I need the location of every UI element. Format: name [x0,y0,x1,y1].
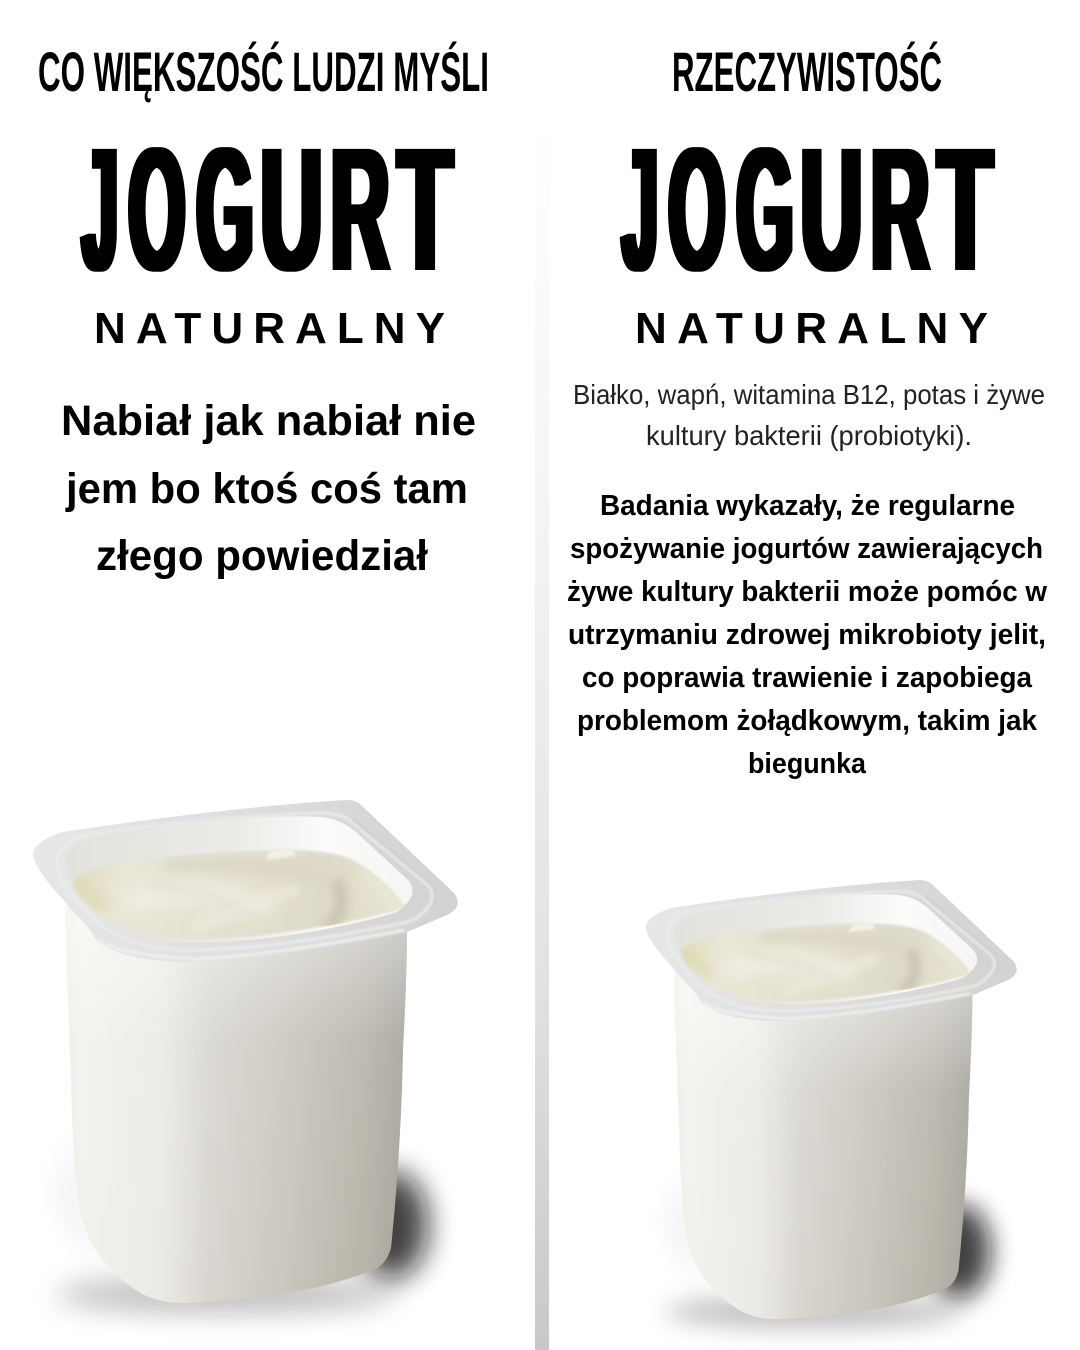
text block: research findings: utrzymaniu zdrowej mikrobioty jelit, [568,619,1046,651]
title: jogurt left: J [82,112,118,308]
image: yogurt cup left [33,800,458,1313]
title: jogurt right: J [622,112,658,308]
text block: common belief [61,397,476,580]
subtitle: naturalny right: NATURALNY [635,304,988,353]
title: jogurt left: T [398,112,453,308]
text block: common belief: Nabiał jak nabiał nie [61,397,476,445]
image: yogurt cup right [646,880,1017,1328]
text block: research findings: żywe kultury bakterii może pomóc w [567,576,1047,608]
title: jogurt right: T [938,112,993,308]
text block: research findings: biegunka [748,748,867,780]
text block: common belief: jem bo ktoś coś tam [65,465,468,513]
title: jogurt right: R [871,112,929,308]
heading: left column: CO WIĘKSZOŚĆ LUDZI MYŚLI [38,40,489,103]
divider between columns [535,120,549,1350]
title: jogurt right: U [800,112,862,308]
panel: reality [567,40,1047,1328]
title: jogurt left: O [128,112,185,308]
text block: research findings: problemom żołądkowym, takim jak [577,705,1038,737]
subtitle: naturalny left: NATURALNY [94,304,445,353]
text block: research findings: spożywanie jogurtów zawierających [570,533,1043,565]
panel: what most people think [33,40,489,1313]
text block: common belief: złego powiedział [96,532,428,580]
title: jogurt left: G [196,112,254,308]
title: jogurt left: U [260,112,322,308]
text block: research findings: Badania wykazały, że regularne [600,490,1015,522]
text block: nutrients: kultury bakterii (probiotyki). [646,420,972,451]
text block: nutrients: Białko, wapń, witamina B12, potas i żywe [573,379,1045,410]
title: jogurt left: R [331,112,389,308]
text block: research findings: co poprawia trawienie i zapobiega [582,662,1033,694]
title: jogurt right: O [668,112,725,308]
text block: nutrients [573,379,1045,451]
title: jogurt right: G [736,112,794,308]
text block: research findings [567,490,1047,780]
